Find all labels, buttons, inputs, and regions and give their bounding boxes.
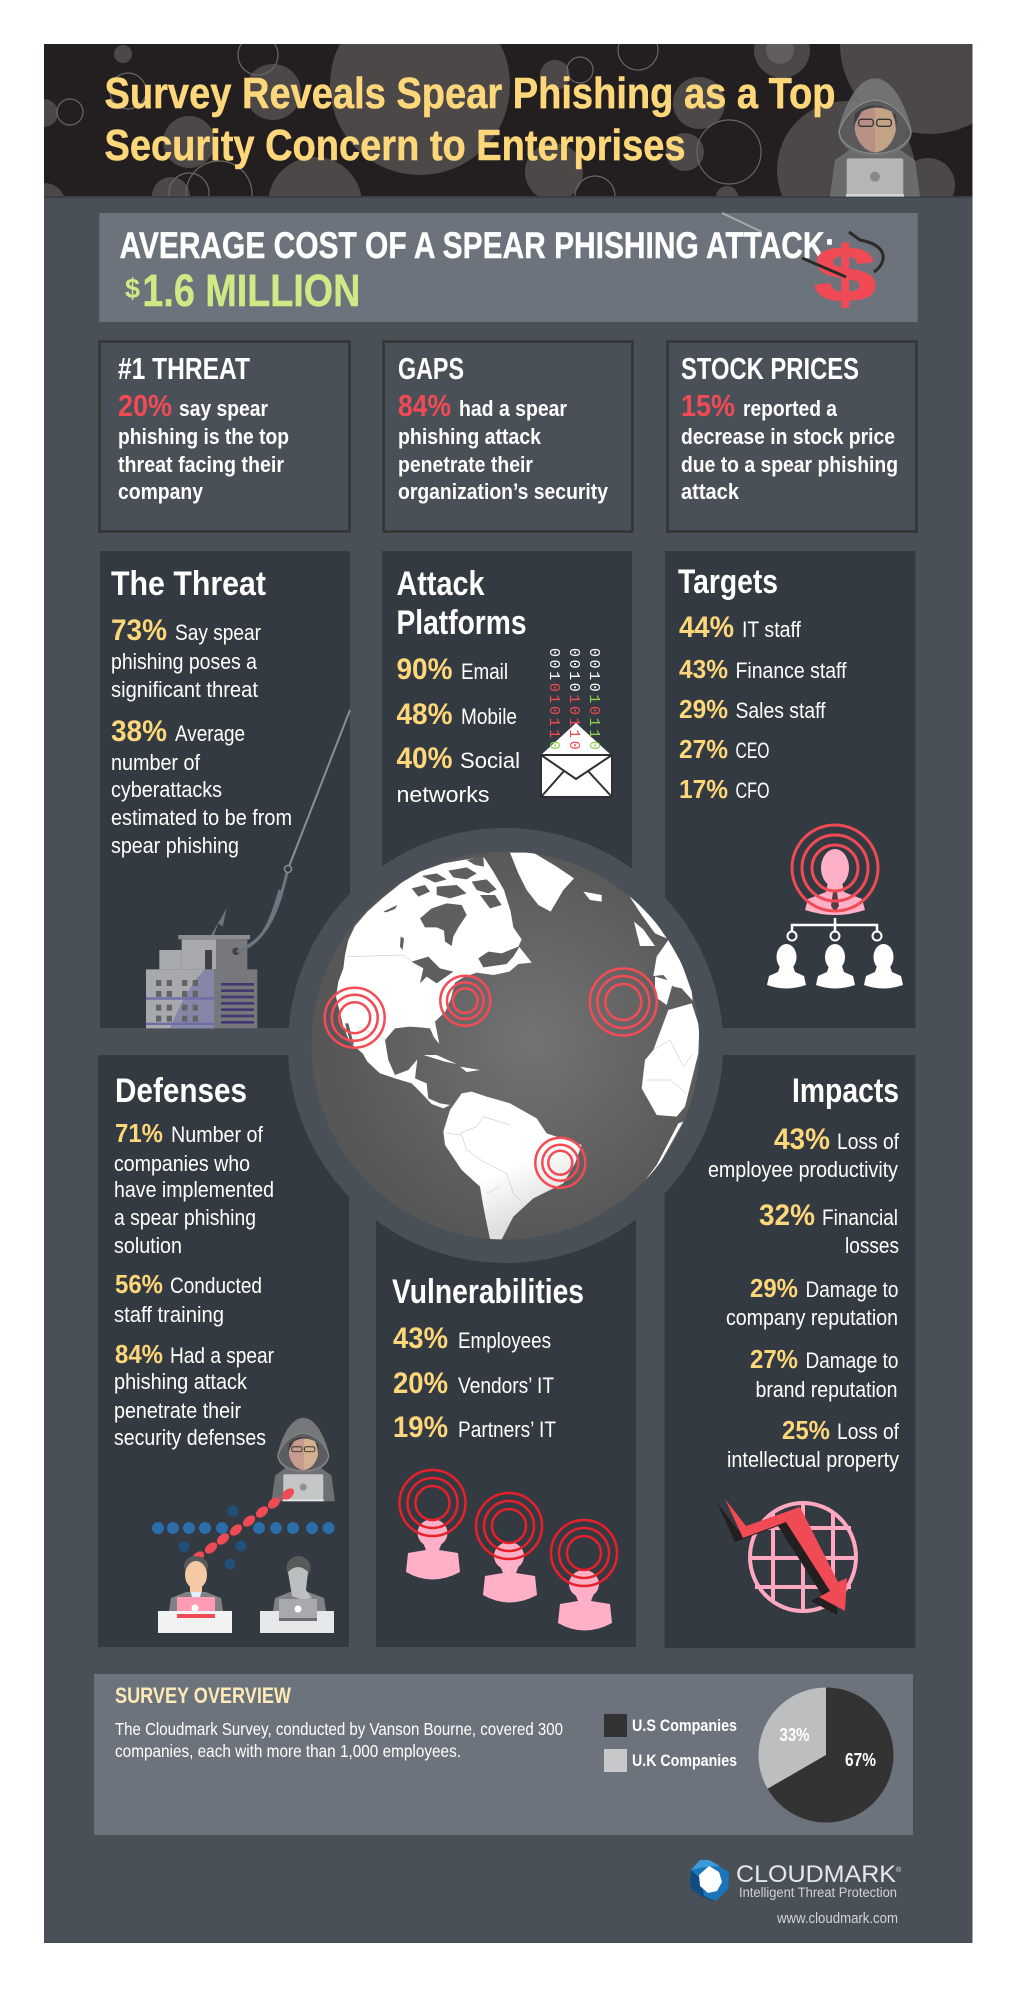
panel: gaps: had a spear [459, 396, 567, 421]
panel: defenses: security defenses [114, 1425, 266, 1450]
icon: hooked dollar: $ [814, 230, 876, 318]
icon: targeted executive with org chart [767, 825, 903, 988]
panel: the threat: The Threat [111, 565, 266, 603]
panel: targets: CFO [736, 778, 770, 803]
icon: envelope with binary: 001 01011 0 [545, 648, 562, 752]
icon: envelope with binary: 0010 1 0 110 [585, 648, 602, 752]
survey description: companies, each with more than 1,000 employees. [115, 1741, 461, 1761]
panel: the threat: 38% [111, 715, 167, 748]
panel: gaps [384, 342, 632, 532]
panel: impacts: Loss of [837, 1419, 900, 1444]
panel: stock prices: reported a [743, 396, 838, 421]
panel: defenses: solution [114, 1233, 182, 1258]
panel: defenses: phishing attack [114, 1369, 248, 1394]
panel: the threat: estimated to be from [111, 805, 292, 830]
panel: impacts: brand reputation [756, 1377, 898, 1402]
cost value: $ [125, 273, 140, 304]
panel: targets: 44% [679, 611, 734, 644]
panel: targets: Targets [678, 563, 778, 601]
legend [604, 1714, 737, 1772]
header bubble pattern [44, 44, 972, 196]
panel: defenses: a spear phishing [114, 1205, 256, 1230]
panel: the threat: Average [175, 721, 245, 746]
panel: impacts: 43% [774, 1123, 830, 1156]
panel: vulnerabilities: Vendors’ IT [458, 1373, 554, 1398]
panel: stock prices: attack [681, 479, 740, 504]
panel: attack platforms: 48% [396, 698, 452, 731]
target rings on globe [325, 968, 657, 1188]
panel: vulnerabilities [376, 1055, 636, 1647]
logo: cloudmark: ® [896, 1866, 902, 1874]
panel: defenses: Conducted [170, 1273, 262, 1298]
panel: gaps: organization’s security [398, 479, 609, 504]
panel: attack platforms: Platforms [396, 604, 526, 642]
logo: cloudmark [690, 1860, 902, 1927]
panel: #1 threat: phishing is the top [118, 424, 289, 449]
legend: U.K Companies [632, 1751, 737, 1770]
logo: cloudmark: Intelligent Threat Protection [739, 1885, 897, 1900]
panel: defenses: Defenses [115, 1072, 247, 1110]
panel: targets: 27% [679, 734, 728, 764]
panel: impacts: company reputation [726, 1305, 898, 1330]
panel: attack platforms: 90% [396, 653, 452, 686]
panel: attack platforms: Attack [396, 565, 485, 603]
panel: defenses: 56% [115, 1269, 163, 1299]
panel: gaps: GAPS [398, 351, 464, 386]
panel: #1 threat: 20% [118, 388, 172, 423]
title [104, 69, 836, 170]
pie chart: 33% [780, 1725, 810, 1745]
globe map [312, 852, 700, 1240]
panel: impacts: Impacts [792, 1072, 899, 1110]
panel: #1 threat: #1 THREAT [118, 351, 250, 386]
panel: the threat: spear phishing [111, 833, 239, 858]
panel: attack platforms: Mobile [461, 704, 517, 729]
icon: hooked dollar [722, 213, 883, 318]
greenland and iceland [510, 853, 602, 912]
icon: envelope with binary [541, 648, 612, 797]
panel: gaps: 84% [398, 388, 451, 423]
caribbean islands [423, 1055, 480, 1072]
icon: male employee [158, 1556, 232, 1633]
panel: stock prices: due to a spear phishing [681, 452, 898, 477]
panel: impacts: 29% [750, 1273, 798, 1303]
header banner [44, 44, 972, 198]
panel: the threat: Say spear [175, 620, 261, 645]
panel: attack platforms: 40% [396, 742, 452, 775]
panel: the threat: cyberattacks [111, 777, 222, 802]
logo: cloudmark: CLOUDMARK [736, 1861, 896, 1888]
panel: targets: IT staff [742, 617, 802, 642]
globe ring [288, 828, 723, 1263]
survey heading: SURVEY OVERVIEW [115, 1683, 291, 1708]
panel: the threat [100, 551, 350, 1028]
panel: defenses: have implemented [114, 1177, 274, 1202]
panel: vulnerabilities: 43% [393, 1322, 448, 1355]
panel: targets: 43% [679, 654, 728, 684]
panel: defenses: penetrate their [114, 1398, 241, 1423]
panel: defenses: staff training [114, 1302, 224, 1327]
panel: impacts: Damage to [806, 1348, 898, 1373]
panel: targets [665, 551, 916, 1028]
title: Security Concern to Enterprises [104, 121, 686, 170]
cost value: 1.6 MILLION [142, 265, 360, 316]
panel: survey overview [94, 1674, 913, 1835]
survey description [115, 1719, 563, 1761]
panel: the threat: number of [111, 750, 201, 775]
panel: vulnerabilities: Employees [458, 1328, 551, 1353]
icon: hooded hacker header [830, 78, 920, 197]
panel: vulnerabilities: Vulnerabilities [392, 1273, 584, 1311]
panel: defenses: 84% [115, 1339, 163, 1369]
panel: #1 threat [100, 342, 350, 532]
panel: attack platforms: networks [396, 782, 490, 807]
panel: attack platforms [382, 551, 632, 1028]
south america land [443, 1092, 582, 1239]
panel: gaps: penetrate their [398, 452, 533, 477]
panel: defenses: 71% [115, 1118, 163, 1148]
panel: defenses: Had a spear [170, 1343, 274, 1368]
panel: impacts: intellectual property [727, 1447, 899, 1472]
pie chart [758, 1688, 894, 1822]
icon: female employee [260, 1556, 334, 1633]
europe and africa land [629, 896, 699, 1189]
panel: impacts: 25% [782, 1415, 830, 1445]
panel: impacts: 27% [750, 1344, 798, 1374]
panel: impacts: Financial [822, 1205, 898, 1230]
panel: stock prices: STOCK PRICES [681, 351, 859, 386]
website: www.cloudmark.com [776, 1910, 898, 1927]
panel: targets: Sales staff [736, 698, 826, 723]
icon: envelope with binary: 0010 10110 [565, 648, 582, 752]
panel: defenses [98, 1055, 349, 1647]
title: Survey Reveals Spear Phishing as a Top [104, 69, 836, 118]
panel: targets: 29% [679, 694, 728, 724]
icon: cloudmark gem [690, 1860, 729, 1901]
country borders [348, 955, 693, 1200]
panel: #1 threat: company [118, 479, 204, 504]
panel: attack platforms: Social [460, 748, 520, 773]
panel: attack platforms: Email [461, 659, 508, 684]
panel: stock prices: 15% [681, 388, 735, 423]
panel: #1 threat: threat facing their [118, 452, 284, 477]
panel: impacts [664, 1055, 916, 1648]
panel: the threat: phishing poses a [111, 649, 258, 674]
panel: gaps: phishing attack [398, 424, 542, 449]
north america land [336, 857, 532, 1108]
panel: defenses: companies who [114, 1151, 250, 1176]
icon: hacker attacking through firewall [152, 1418, 335, 1633]
average cost heading: AVERAGE COST OF A SPEAR PHISHING ATTACK: [120, 225, 834, 266]
panel: vulnerabilities: Partners’ IT [458, 1417, 556, 1442]
panel: targets: CEO [736, 738, 770, 763]
icon: targeted people [400, 1470, 617, 1630]
pie chart: 67% [845, 1750, 876, 1770]
panel: the threat: 73% [111, 614, 167, 647]
panel: defenses: Number of [171, 1122, 264, 1147]
panel: vulnerabilities: 20% [393, 1367, 448, 1400]
panel: vulnerabilities: 19% [393, 1411, 448, 1444]
panel: the threat: significant threat [111, 677, 258, 702]
panel: average cost banner [99, 213, 918, 322]
icon: falling arrow over globe [717, 1499, 856, 1615]
panel: impacts: 32% [759, 1199, 815, 1232]
survey description: The Cloudmark Survey, conducted by Vanson Bourne, covered 300 [115, 1719, 563, 1739]
panel: stock prices [668, 342, 916, 532]
icon: hooked building [146, 710, 350, 1028]
panel: targets: 17% [679, 774, 728, 804]
panel: impacts: employee productivity [708, 1157, 898, 1182]
panel: stock prices: decrease in stock price [681, 424, 895, 449]
panel: targets: Finance staff [736, 658, 847, 683]
panel: impacts: Loss of [837, 1129, 900, 1154]
panel: #1 threat: say spear [179, 396, 268, 421]
legend: U.S Companies [632, 1716, 737, 1735]
panel: impacts: Damage to [806, 1277, 898, 1302]
panel: impacts: losses [845, 1233, 899, 1258]
